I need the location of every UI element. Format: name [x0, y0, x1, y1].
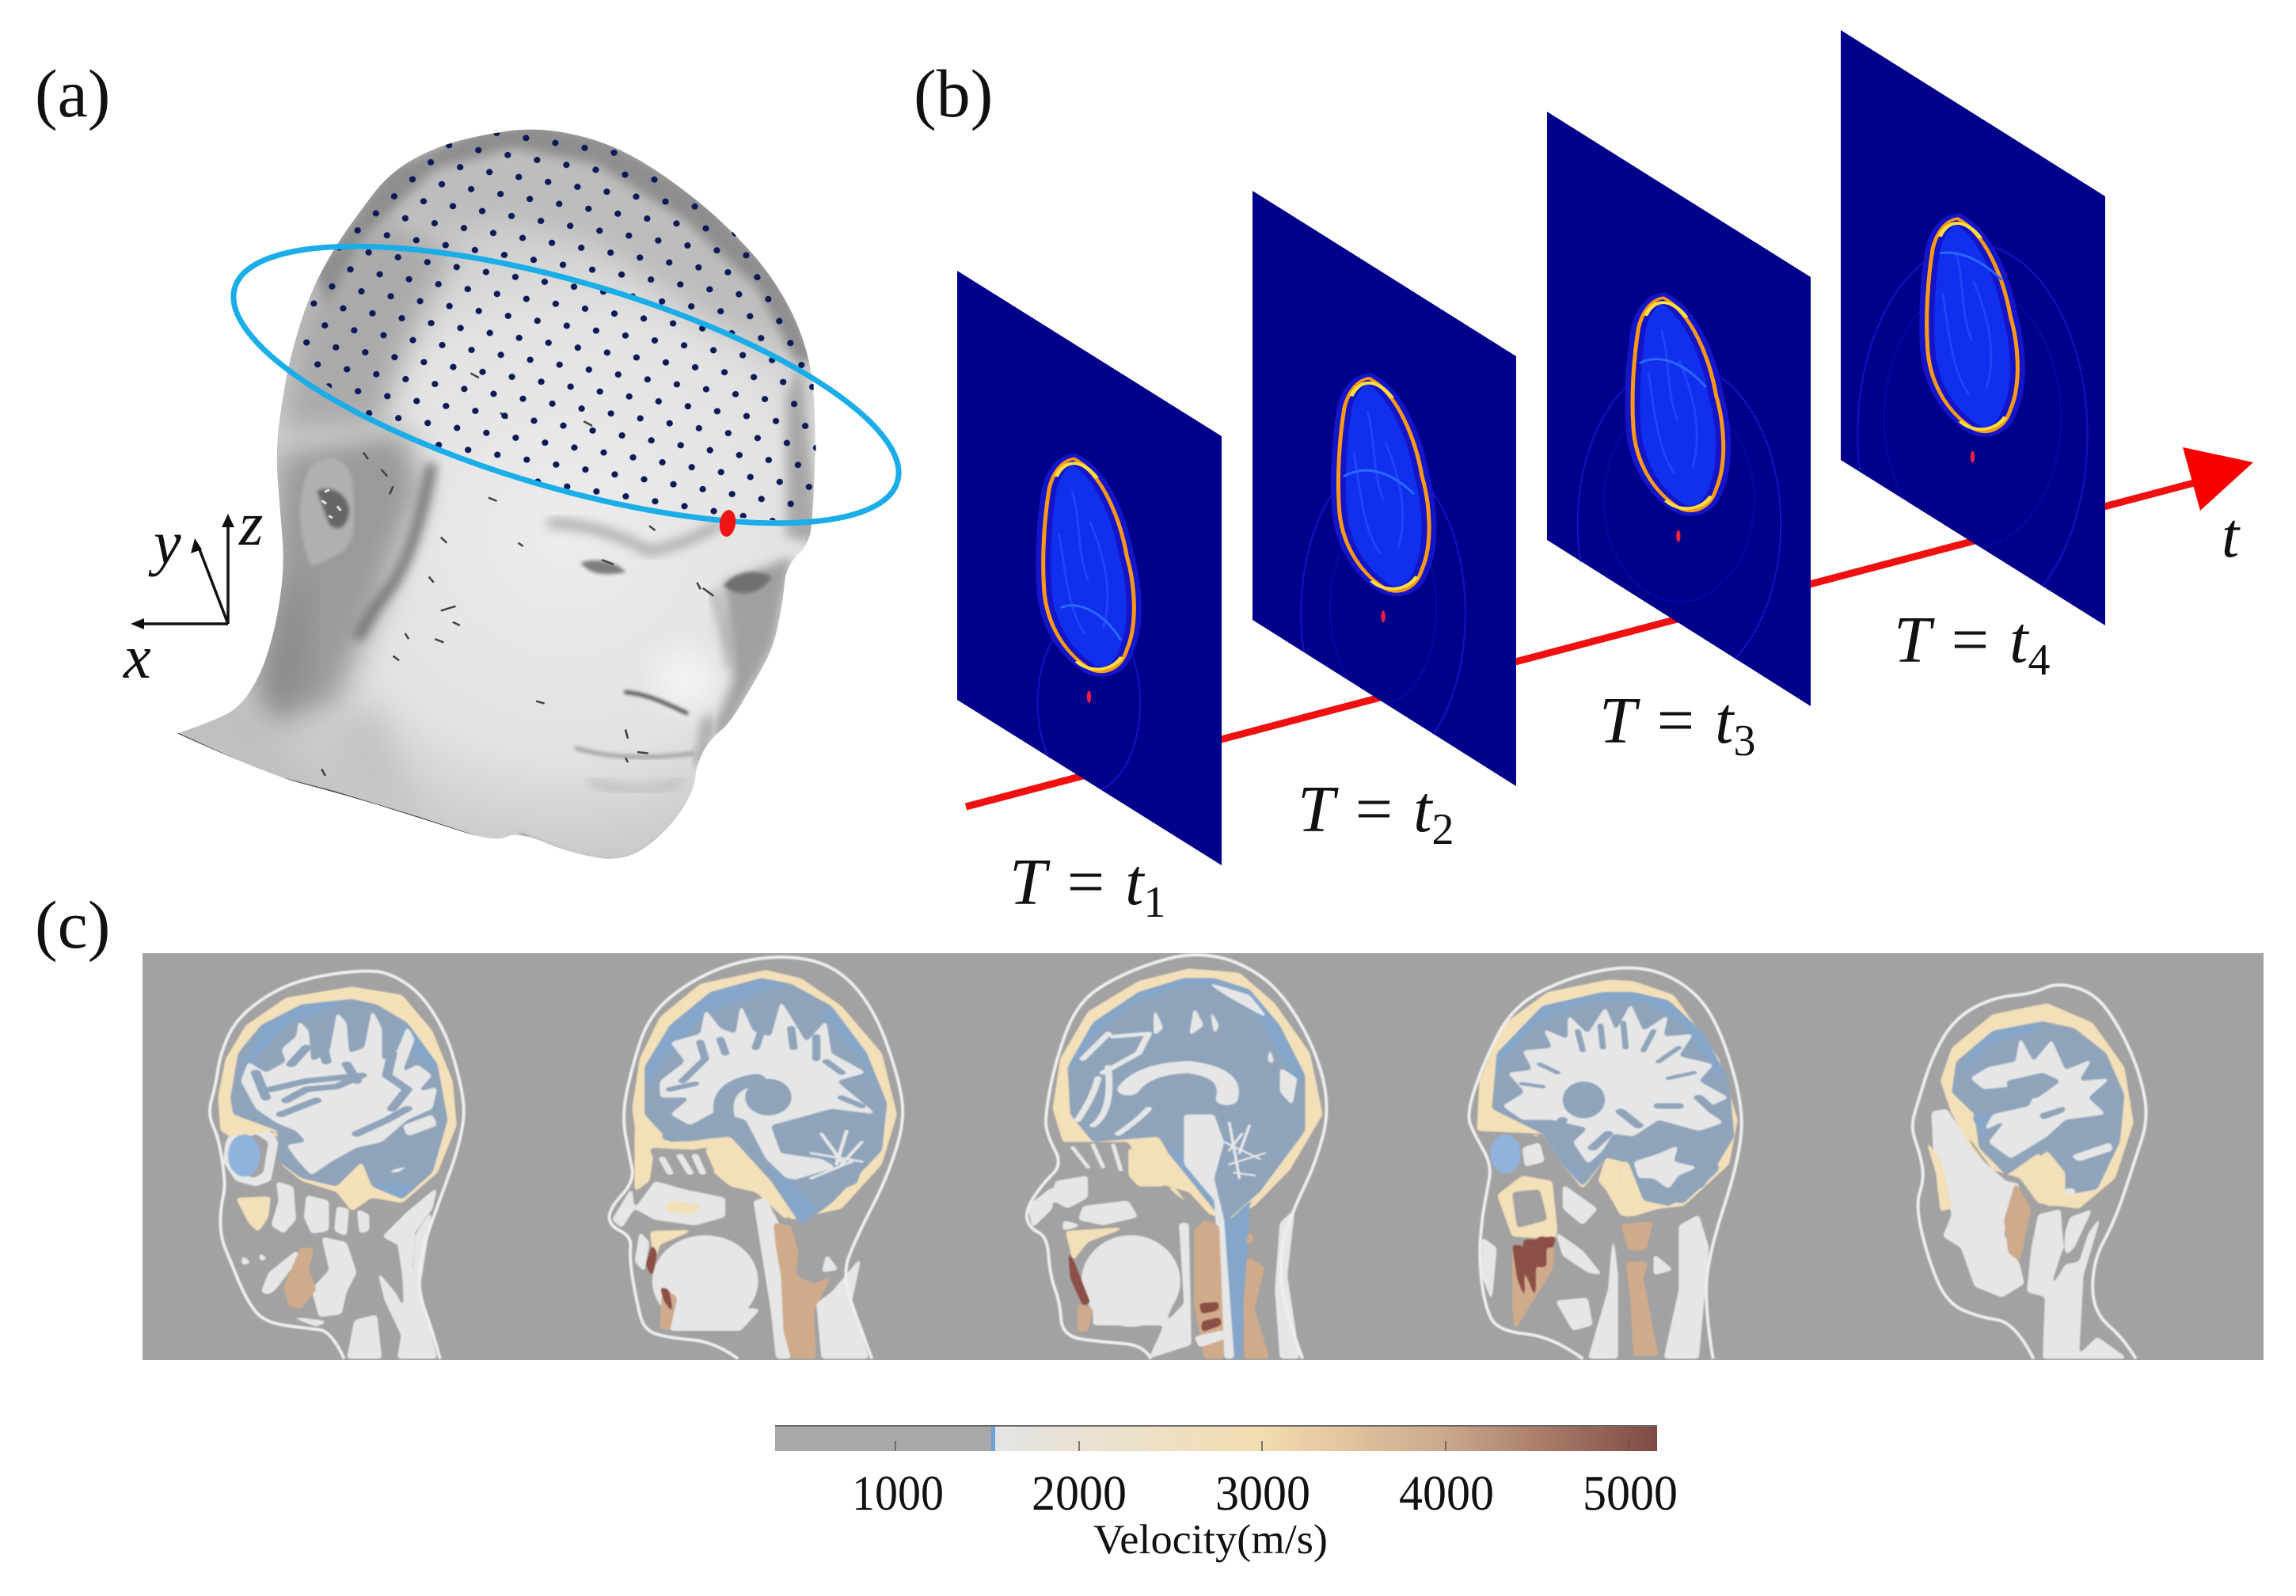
receiver dots on scalp [286, 124, 822, 526]
snapshot plane t2 [1253, 191, 1516, 854]
time axis arrow: t [2222, 501, 2241, 571]
coordinate axes: x [123, 622, 151, 691]
coordinate axes: y [148, 508, 181, 577]
panel label (c): (c) [35, 887, 110, 963]
tick labels: 2000 [1032, 1467, 1127, 1521]
slice 3 [1027, 955, 1326, 1358]
label T=t2: 2 [1431, 805, 1454, 854]
skin speckles [321, 373, 713, 776]
label T=t1: 1 [1143, 878, 1165, 927]
snapshot plane t1 [957, 271, 1222, 927]
slice 4 [1469, 968, 1742, 1358]
label T=t4: T = t [1894, 603, 2028, 677]
slice 5 [1913, 985, 2146, 1358]
panel: sagittal velocity slices [143, 953, 2264, 1360]
colorbar title: Velocity(m/s) [1093, 1517, 1328, 1563]
panel label (b): (b) [914, 55, 993, 131]
colorbar with velocity scale [775, 1425, 1678, 1563]
label T=t2: T = t [1298, 773, 1431, 846]
panel: wavefield snapshots along time axis [957, 30, 2253, 927]
tick labels: 1000 [852, 1467, 944, 1521]
label T=t1: T = t [1009, 846, 1143, 919]
slice 2 [610, 957, 903, 1358]
label T=t4: 4 [2028, 636, 2050, 685]
snapshot plane t4 [1841, 30, 2105, 685]
panel: 3D head with receiver dots and source ring [123, 124, 926, 874]
gradient bar [775, 1425, 1657, 1451]
tick labels: 4000 [1399, 1467, 1494, 1521]
coordinate axes: z [238, 489, 263, 558]
shaded scalp and back of head [262, 430, 423, 712]
source ring [206, 189, 926, 580]
label T=t3: T = t [1599, 684, 1733, 758]
coordinate axes [123, 489, 263, 691]
head surface [177, 124, 819, 874]
ear [300, 458, 355, 565]
tick labels: 5000 [1583, 1467, 1678, 1521]
snapshot plane t3 [1547, 112, 1811, 766]
tick labels: 3000 [1215, 1467, 1310, 1521]
panel label (a): (a) [35, 55, 110, 131]
time axis arrow [966, 447, 2253, 807]
label T=t3: 3 [1733, 716, 1755, 766]
slice 1 [210, 971, 464, 1358]
tick labels [852, 1467, 1678, 1521]
source point [718, 509, 737, 538]
